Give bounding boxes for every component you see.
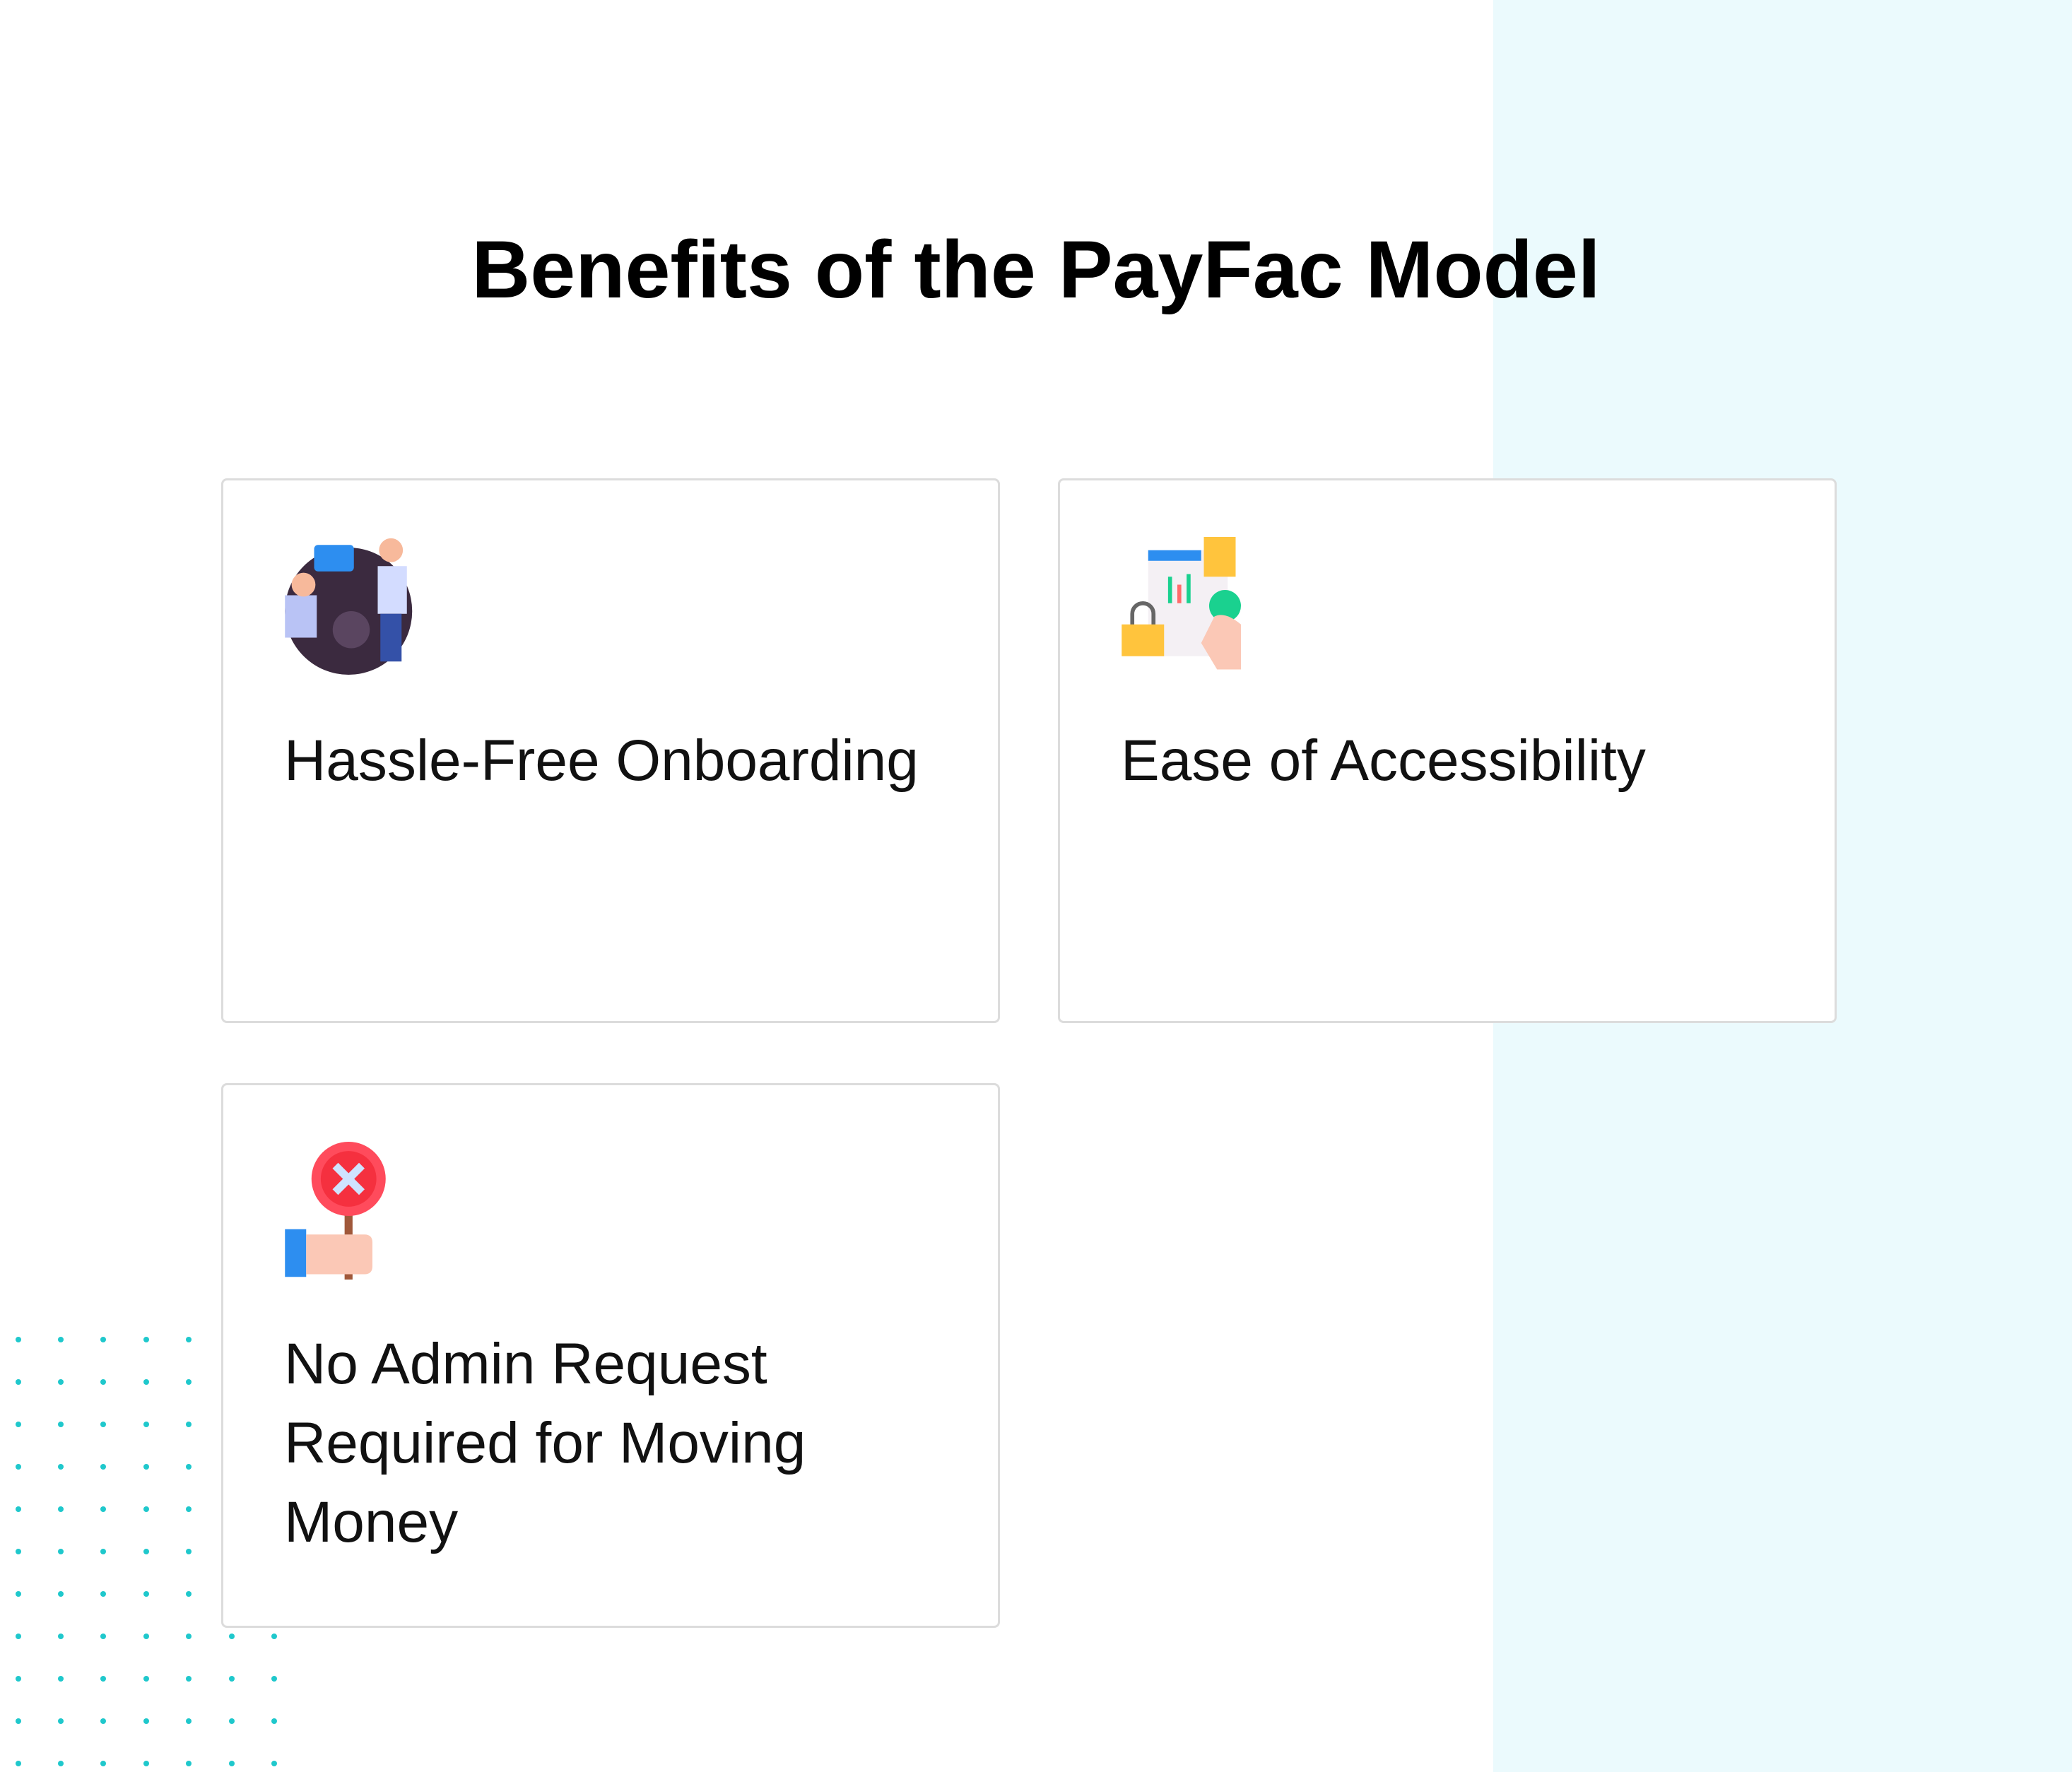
icon: hand holding stop sign — [285, 1142, 386, 1280]
text: Required for Moving — [284, 1411, 806, 1475]
text: No Admin Request — [284, 1332, 767, 1396]
icon: accessibility dashboard — [1122, 537, 1241, 670]
text: Ease of Accessibility — [1121, 728, 1646, 793]
text: Money — [284, 1490, 458, 1554]
panel: hassle-free onboarding — [221, 478, 1000, 1023]
panel: no admin request — [221, 1083, 1000, 1628]
dots pattern — [16, 1337, 277, 1766]
icon: handshake meeting — [285, 538, 413, 675]
text: Hassle-Free Onboarding — [284, 728, 919, 793]
title: Benefits of the PayFac Model — [471, 225, 1601, 315]
panel: ease of accessibility — [1058, 478, 1837, 1023]
text — [284, 1332, 806, 1554]
